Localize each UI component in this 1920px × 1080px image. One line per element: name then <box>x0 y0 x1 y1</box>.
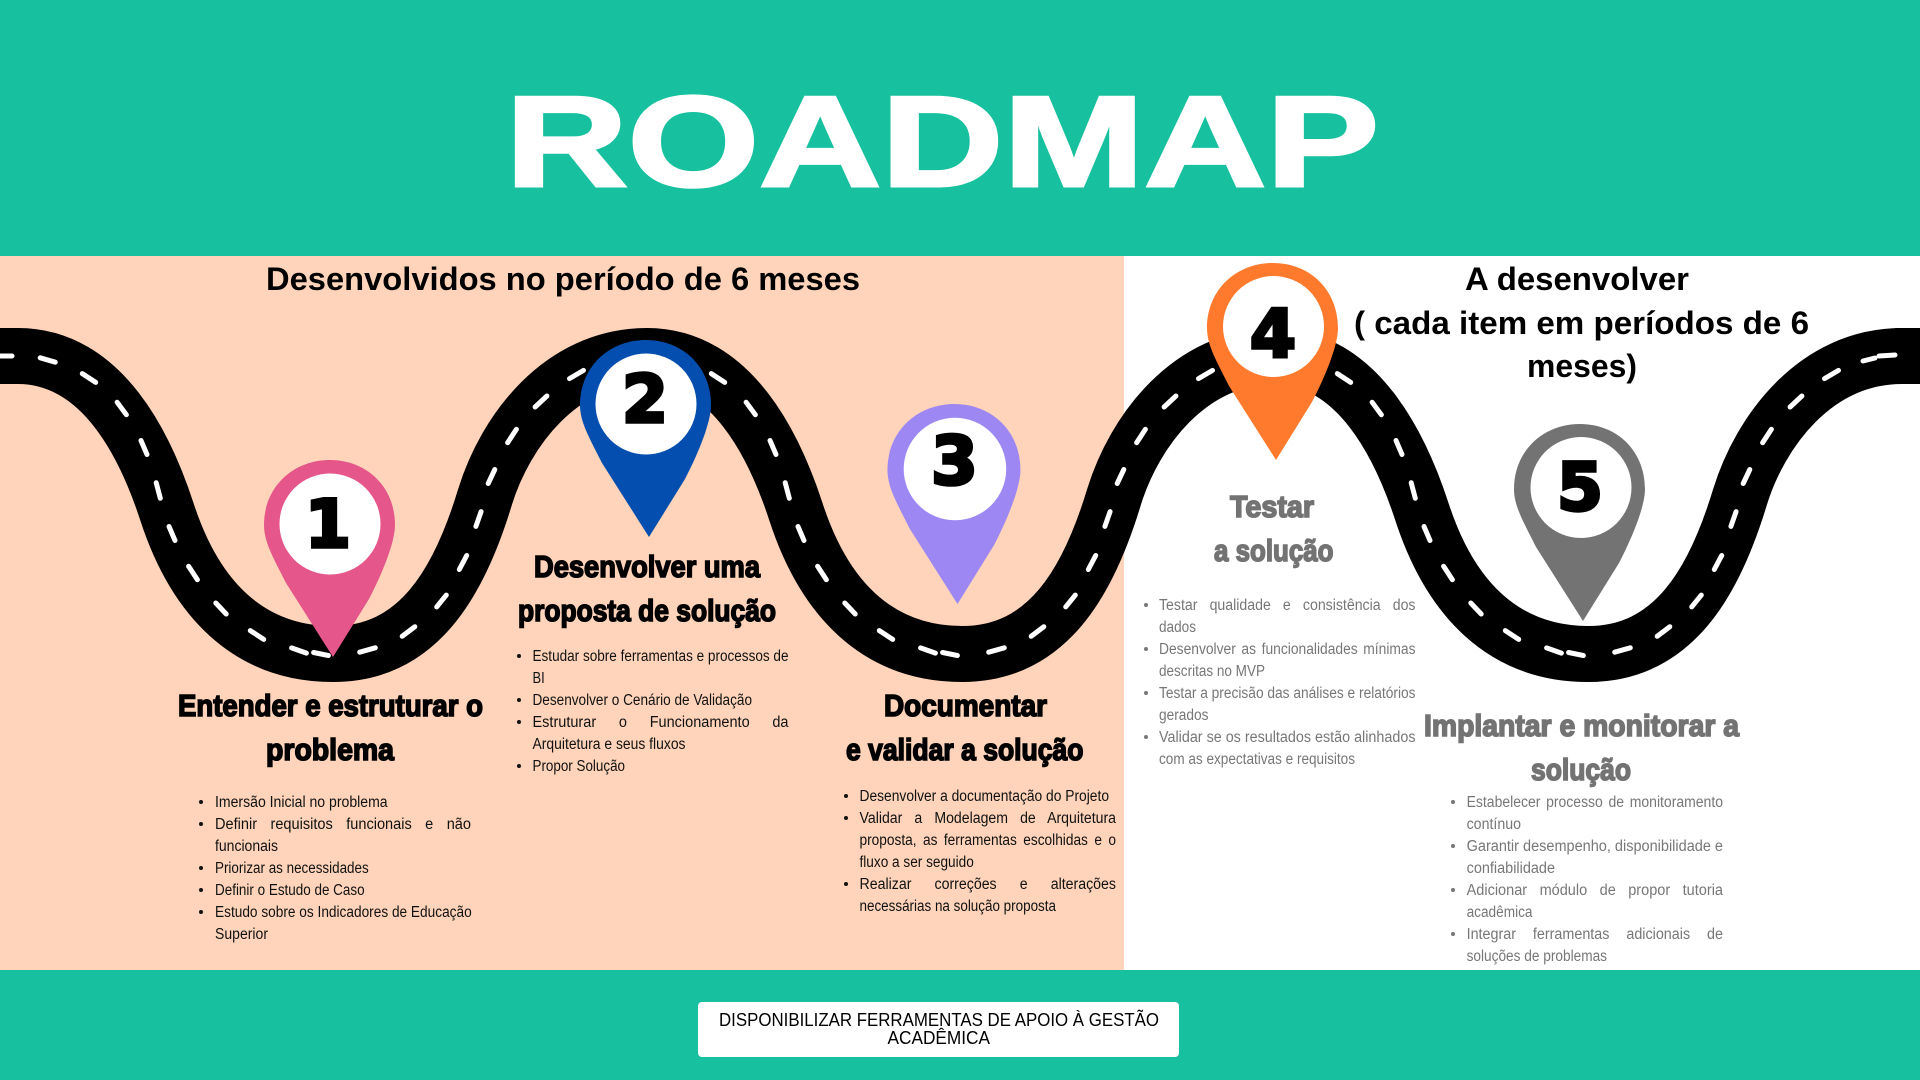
panel: developed period background <box>0 256 1124 970</box>
pin 3: 3 <box>931 422 978 500</box>
step 2 heading: Desenvolver uma <box>534 549 761 584</box>
step 2 list: Estruturar o Funcionamento da <box>532 714 789 731</box>
step 4 heading <box>1214 489 1334 568</box>
step 4 heading: Testar <box>1230 489 1314 524</box>
step 1 list: Superior <box>215 926 268 943</box>
step 1: text block <box>178 688 483 943</box>
step 2 heading <box>518 549 776 628</box>
step 4 list: Validar se os resultados estão alinhados <box>1159 729 1416 746</box>
pin 4 <box>1207 263 1338 460</box>
step 3 heading: e validar a solução <box>846 732 1084 767</box>
step 2 list: Propor Solução <box>532 758 625 775</box>
step 3 list: Validar a Modelagem de Arquitetura <box>860 810 1116 827</box>
step 1 list: Definir o Estudo de Caso <box>215 882 365 899</box>
heading: to be developed <box>1354 261 1809 384</box>
step 4 list: com as expectativas e requisitos <box>1159 751 1355 768</box>
step 2: text block <box>517 549 789 775</box>
goal callout button <box>698 1002 1179 1057</box>
heading: to be developed: A desenvolver <box>1465 261 1689 297</box>
heading: to be developed: meses) <box>1527 348 1637 384</box>
step 1 heading: Entender e estruturar o <box>178 688 483 723</box>
pin 5: 5 <box>1557 449 1603 526</box>
step 5 list: Adicionar módulo de propor tutoria <box>1467 882 1723 899</box>
pin 5 <box>1514 424 1645 621</box>
heading: developed in 6 months: Desenvolvidos no período de 6 meses <box>266 261 860 297</box>
step 3: text block <box>844 688 1116 915</box>
step 4 list <box>1144 597 1416 768</box>
step 5 heading <box>1424 708 1740 787</box>
heading: to be developed: ( cada item em períodos de 6 <box>1354 305 1809 341</box>
step 2 list: BI <box>532 670 545 687</box>
step 5 list: confiabilidade <box>1467 860 1555 877</box>
road <box>0 355 1920 656</box>
goal callout button: DISPONIBILIZAR FERRAMENTAS DE APOIO À GESTÃO <box>719 1009 1159 1030</box>
step 4 heading: a solução <box>1214 533 1334 568</box>
step 4 list: dados <box>1159 619 1196 636</box>
step 4 list: gerados <box>1159 707 1209 724</box>
step 3 heading: Documentar <box>884 688 1047 723</box>
step 5 list: Garantir desempenho, disponibilidade e <box>1467 838 1723 855</box>
step 1 list: Priorizar as necessidades <box>215 860 369 877</box>
step 5 list <box>1451 794 1723 965</box>
step 3 list: necessárias na solução proposta <box>860 898 1056 915</box>
step 2 list: Arquitetura e seus fluxos <box>532 736 686 753</box>
step 1 list: Imersão Inicial no problema <box>215 794 388 811</box>
step 5 list: soluções de problemas <box>1467 948 1607 965</box>
step 1 list <box>199 794 472 943</box>
step 4 list: descritas no MVP <box>1159 663 1265 680</box>
step 3 list: proposta, as ferramentas escolhidas e o <box>860 832 1116 849</box>
step 5 list: Integrar ferramentas adicionais de <box>1467 926 1723 943</box>
step 1 list: Estudo sobre os Indicadores de Educação <box>215 904 472 921</box>
step 5 list: contínuo <box>1467 816 1521 833</box>
step 2 list: Estudar sobre ferramentas e processos de <box>532 648 788 665</box>
step 5 heading: solução <box>1531 752 1631 787</box>
step 4 list: Desenvolver as funcionalidades mínimas <box>1159 641 1416 658</box>
step 3 list: fluxo a ser seguido <box>860 854 974 871</box>
step 2 list: Desenvolver o Cenário de Validação <box>532 692 752 709</box>
panel: to-develop background <box>1124 256 1920 970</box>
step 4 list: Testar qualidade e consistência dos <box>1159 597 1416 614</box>
step 5 list: acadêmica <box>1467 904 1533 921</box>
step 3 list: Realizar correções e alterações <box>860 876 1116 893</box>
pin 2 <box>580 340 711 537</box>
step 2 heading: proposta de solução <box>518 593 776 628</box>
pin 4: 4 <box>1250 296 1296 373</box>
step 2 list <box>517 648 789 775</box>
step 1 heading: problema <box>266 732 395 767</box>
step 5: text block <box>1424 708 1740 965</box>
goal callout button: ACADÊMICA <box>888 1027 991 1048</box>
step 4 list: Testar a precisão das análises e relatórios <box>1159 685 1416 702</box>
step 1 list: Definir requisitos funcionais e não <box>215 816 471 833</box>
pin 3 <box>887 404 1020 604</box>
pin 1: 1 <box>305 486 351 563</box>
panel: bottom band <box>0 970 1920 1080</box>
pin 1 <box>264 460 395 657</box>
step 5 list: Estabelecer processo de monitoramento <box>1467 794 1723 811</box>
step 3 list <box>844 788 1116 915</box>
step 3 list: Desenvolver a documentação do Projeto <box>860 788 1109 805</box>
title: ROADMAP <box>506 70 1379 214</box>
step 3 heading <box>846 688 1084 767</box>
panel: top title band <box>0 0 1920 256</box>
step 1 list: funcionais <box>215 838 278 855</box>
pin 2: 2 <box>622 361 668 438</box>
step 1 heading <box>178 688 483 767</box>
step 4: text block <box>1144 489 1416 768</box>
step 5 heading: Implantar e monitorar a <box>1424 708 1740 743</box>
